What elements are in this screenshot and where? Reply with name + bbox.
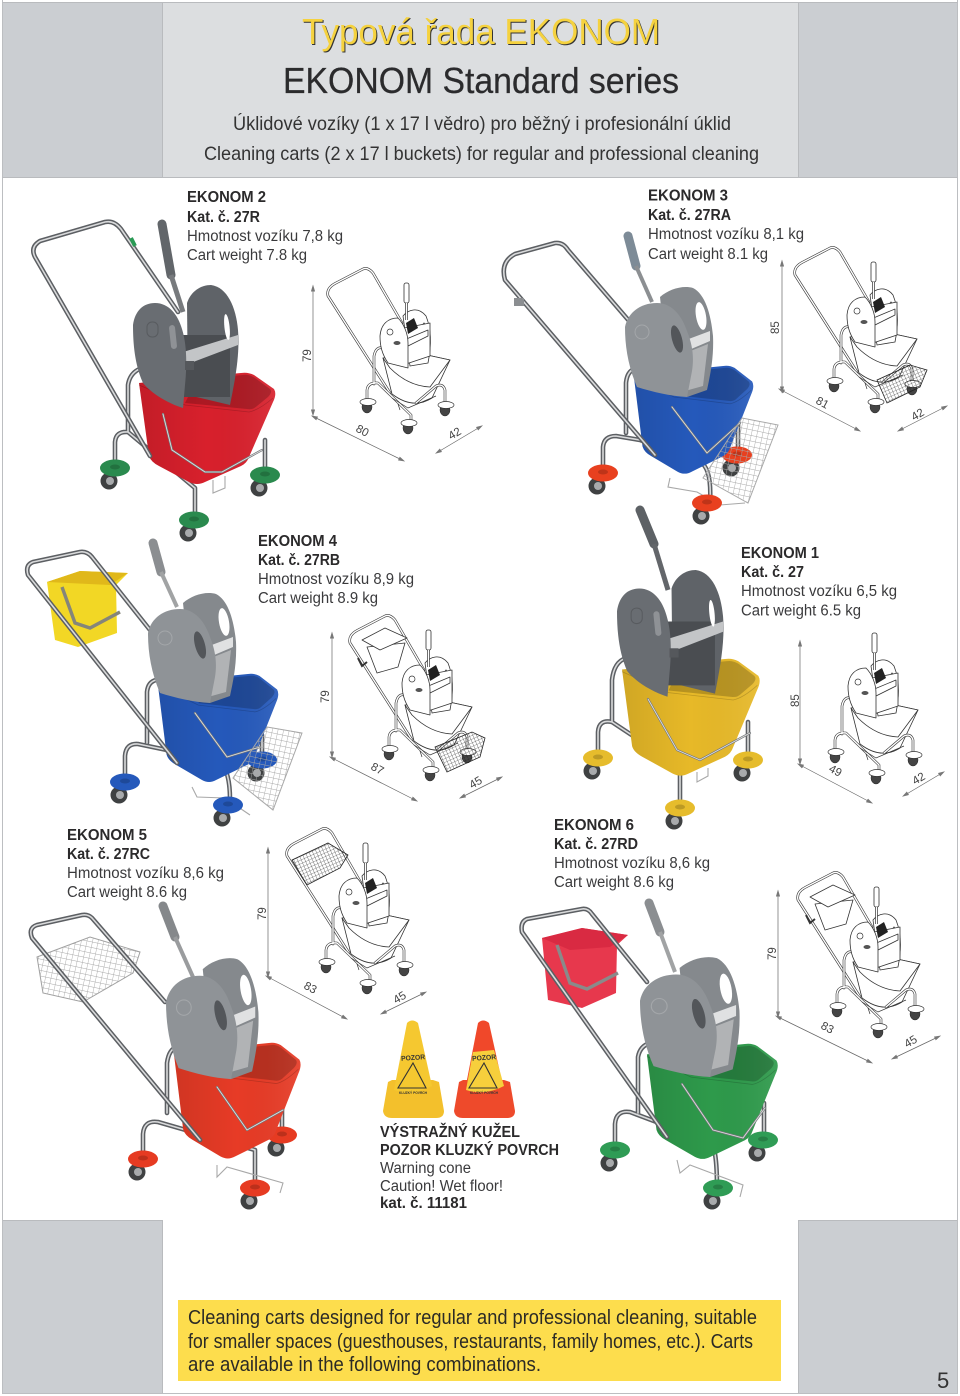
- line drawing: EKONOM 4: 87: [369, 761, 386, 778]
- line drawing: EKONOM 1: 49: [827, 763, 844, 780]
- label: warning cone: POZOR KLUZKÝ POVRCH: [380, 1141, 559, 1159]
- line drawing: EKONOM 3: 42: [910, 407, 927, 424]
- line drawing: EKONOM 6: [767, 872, 938, 1062]
- yellow note: Cleaning carts designed for regular and professional cleaning, suitable: [188, 1307, 757, 1329]
- label: EKONOM 5: Kat. č. 27RC: [67, 846, 150, 863]
- label: EKONOM 1: Hmotnost vozíku 6,5 kg: [741, 583, 897, 600]
- label: EKONOM 6: Hmotnost vozíku 8,6 kg: [554, 855, 710, 872]
- label: EKONOM 4: EKONOM 4: [258, 533, 337, 550]
- label: EKONOM 3: EKONOM 3: [648, 188, 728, 204]
- title: Typová řada EKONOM: [302, 11, 660, 52]
- line drawing: EKONOM 1: [790, 633, 942, 802]
- label: warning cone: VÝSTRAŽNÝ KUŽEL: [380, 1123, 520, 1141]
- line drawing: EKONOM 2: [302, 268, 480, 460]
- cart photo: EKONOM 4 blue with basket and yellow bucket: [27, 543, 302, 826]
- label: EKONOM 1: Cart weight 6.5 kg: [741, 602, 861, 620]
- footer panel left: [3, 1220, 162, 1393]
- line drawing: EKONOM 5: 45: [392, 990, 409, 1007]
- header band: [2, 2, 958, 178]
- line drawing: EKONOM 2: 42: [446, 426, 464, 443]
- line drawing: EKONOM 4: 79: [320, 690, 332, 703]
- icon: yellow warning cone: KLUZKÝ POVRCH: [399, 1090, 427, 1095]
- line drawing: EKONOM 3: [770, 248, 945, 430]
- label: warning cone: [380, 1123, 559, 1212]
- label: EKONOM 2: Cart weight 7.8 kg: [187, 247, 307, 264]
- yellow note: [178, 1300, 781, 1381]
- icon: yellow warning cone: POZOR: [401, 1054, 425, 1063]
- label: EKONOM 6: Kat. č. 27RD: [554, 836, 638, 853]
- subtitle: EKONOM Standard series: [283, 60, 679, 101]
- label: EKONOM 5: [67, 827, 224, 901]
- page number: 5: [937, 1368, 949, 1393]
- label: warning cone: Caution! Wet floor!: [380, 1178, 503, 1195]
- cart photo: EKONOM 1 yellow: [583, 510, 763, 830]
- icon: yellow warning cone: [383, 1020, 444, 1118]
- label: EKONOM 3: [648, 188, 804, 263]
- label: EKONOM 2: EKONOM 2: [187, 189, 266, 206]
- line drawing: EKONOM 1: 42: [910, 771, 928, 788]
- label: EKONOM 2: [187, 189, 343, 264]
- label: EKONOM 2: Hmotnost vozíku 7,8 kg: [187, 228, 343, 245]
- line drawing: EKONOM 5: 79: [257, 907, 269, 920]
- label: EKONOM 6: EKONOM 6: [554, 817, 634, 834]
- label: EKONOM 4: [258, 533, 414, 607]
- label: EKONOM 6: [554, 817, 710, 891]
- label: EKONOM 4: Cart weight 8.9 kg: [258, 590, 378, 607]
- label: EKONOM 1: Kat. č. 27: [741, 564, 804, 581]
- icon: red warning cone: [454, 1020, 515, 1118]
- line drawing: EKONOM 4: 45: [468, 775, 485, 792]
- yellow note: for smaller spaces (guesthouses, restaurants, family homes, etc.). Carts: [188, 1331, 753, 1353]
- label: EKONOM 5: EKONOM 5: [67, 827, 147, 844]
- header text Czech: Úklidové vozíky (1 x 17 l vědro) pro běžný i profesionální úklid: [233, 112, 731, 135]
- label: warning cone: kat. č. 11181: [380, 1195, 467, 1212]
- label: EKONOM 4: Kat. č. 27RB: [258, 552, 340, 569]
- label: EKONOM 5: Cart weight 8.6 kg: [67, 884, 187, 901]
- label: EKONOM 5: Hmotnost vozíku 8,6 kg: [67, 865, 224, 882]
- line drawing: EKONOM 5: 83: [302, 980, 319, 997]
- line drawing: EKONOM 3: 85: [770, 321, 782, 334]
- cart photo: EKONOM 5 red with basket on handle: [31, 906, 301, 1210]
- cart photo: EKONOM 6 green with red bucket: [522, 903, 778, 1210]
- label: EKONOM 3: Hmotnost vozíku 8,1 kg: [648, 226, 804, 243]
- label: EKONOM 3: Cart weight 8.1 kg: [648, 246, 768, 263]
- line drawing: EKONOM 2: 80: [354, 423, 371, 440]
- label: EKONOM 4: Hmotnost vozíku 8,9 kg: [258, 571, 414, 588]
- cart photo: EKONOM 3 blue with basket: [504, 236, 778, 524]
- label: EKONOM 1: EKONOM 1: [741, 545, 819, 562]
- cart photo: EKONOM 2 red: [33, 222, 280, 542]
- icon: red warning cone: POZOR: [472, 1054, 496, 1063]
- line drawing: EKONOM 5: [257, 828, 424, 1018]
- label: EKONOM 1: [741, 545, 897, 620]
- label: EKONOM 6: Cart weight 8.6 kg: [554, 874, 674, 891]
- icon: red warning cone: KLUZKÝ POVRCH: [470, 1090, 498, 1095]
- yellow note: are available in the following combinations.: [188, 1354, 541, 1376]
- line drawing: EKONOM 4: [320, 616, 500, 800]
- line drawing: EKONOM 2: 79: [302, 349, 314, 362]
- footer panel right: [798, 1220, 957, 1393]
- label: EKONOM 3: Kat. č. 27RA: [648, 207, 731, 224]
- line drawing: EKONOM 6: 45: [902, 1034, 920, 1051]
- line drawing: EKONOM 3: 81: [814, 395, 831, 412]
- line drawing: EKONOM 1: 85: [790, 694, 802, 707]
- header text English: Cleaning carts (2 x 17 l buckets) for regular and professional cleaning: [204, 143, 759, 165]
- label: warning cone: Warning cone: [380, 1160, 471, 1177]
- line drawing: EKONOM 6: 83: [819, 1020, 836, 1037]
- line drawing: EKONOM 6: 79: [767, 947, 779, 960]
- label: EKONOM 2: Kat. č. 27R: [187, 209, 260, 226]
